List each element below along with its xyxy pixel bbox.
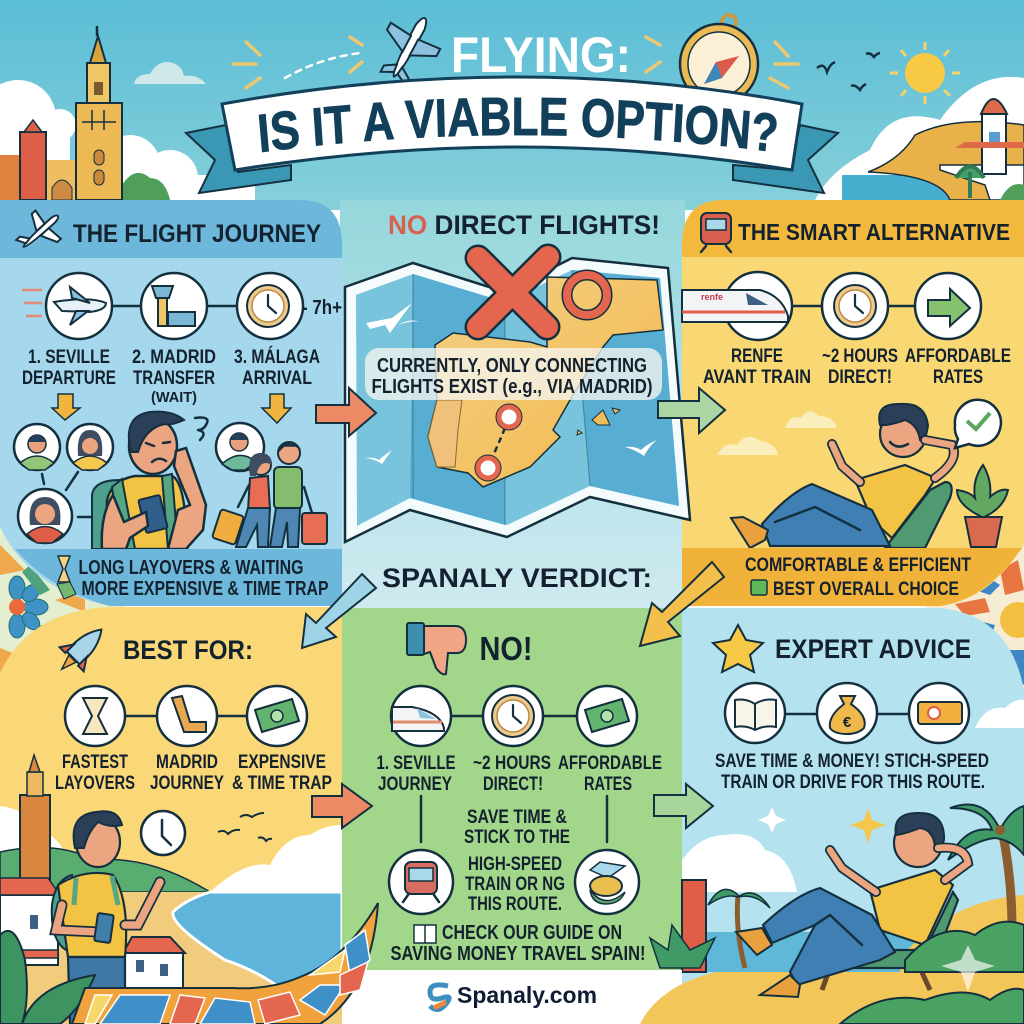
title banner [184, 76, 840, 194]
centre advice text: STICK TO THE [464, 827, 570, 848]
step labels: 1. SEVILLE [376, 753, 456, 774]
centre advice text: TRAIN OR NG [465, 874, 565, 895]
icon: money bag: € [843, 714, 852, 731]
arrow: orange to map [316, 388, 376, 436]
icon: rocket [50, 618, 113, 681]
map caption [365, 348, 662, 400]
step labels: (WAIT) [151, 389, 197, 406]
connector line [110, 305, 240, 307]
alternative labels: RENFE [731, 346, 783, 367]
icon: train [391, 686, 451, 746]
potted plant [957, 465, 1008, 547]
arrow: orange to no panel [312, 784, 372, 828]
down arrows [52, 394, 291, 423]
birds [218, 813, 272, 841]
Seville cathedral skyline [0, 26, 170, 200]
connector [110, 715, 250, 717]
tourist with phone [52, 811, 160, 1024]
sky background [0, 0, 1024, 210]
best for labels: FASTEST [62, 752, 128, 773]
worried traveller [92, 412, 208, 549]
step labels: ARRIVAL [242, 368, 312, 389]
mosaic serpent [72, 903, 378, 1024]
icon: train header [701, 213, 731, 252]
white clouds on horizon [0, 806, 342, 892]
no heading: NO! [480, 630, 532, 667]
step labels: TRANSFER [133, 368, 215, 389]
step labels: ~2 HOURS [473, 753, 551, 774]
icon: train front [389, 850, 453, 914]
arrow: green to expert [654, 784, 713, 828]
panel: flight journey [0, 200, 342, 606]
route [492, 428, 505, 458]
small cloud [134, 62, 206, 84]
step labels: RATES [584, 774, 632, 795]
bushes [840, 922, 1024, 1024]
icon: open book [414, 925, 436, 943]
flight journey bullet text [78, 557, 328, 600]
Iberian peninsula [428, 277, 663, 487]
compass [680, 15, 758, 104]
white houses [0, 878, 185, 989]
verdict bullets: COMFORTABLE & EFFICIENT [745, 555, 971, 576]
sea [173, 892, 342, 1005]
step labels: DIRECT! [483, 774, 543, 795]
left clouds [0, 80, 255, 208]
title banner: IS IT A VIABLE OPTION? [258, 98, 777, 152]
sparkle [941, 945, 995, 992]
verdict heading: SPANALY VERDICT: [382, 563, 652, 593]
alternative labels [703, 346, 1011, 388]
sand [640, 972, 1024, 1024]
step labels: 1. SEVILLE [28, 347, 110, 368]
panel: smart alternative [682, 200, 1024, 606]
expert heading: EXPERT ADVICE [775, 634, 971, 664]
guide callout: SAVING MONEY TRAVEL SPAIN! [390, 943, 646, 965]
bottom band [682, 548, 1022, 606]
sand [0, 892, 342, 1024]
heading: no direct flights: NO DIRECT FLIGHTS! [388, 210, 660, 240]
alternative header band [682, 200, 1024, 257]
icon: money bag on map [575, 850, 639, 914]
bottom band [15, 549, 342, 606]
icon: star [713, 625, 763, 672]
map [345, 257, 690, 542]
connector [780, 713, 920, 715]
red cross [478, 257, 548, 327]
best for heading: BEST FOR: [123, 635, 253, 665]
mosaic right side [925, 535, 1024, 700]
flight journey bullet text: LONG LAYOVERS & WAITING [78, 557, 304, 579]
step labels: JOURNEY [378, 774, 452, 795]
panel: expert advice [640, 608, 1024, 1024]
red circle [567, 275, 607, 315]
arrow: blue verdict to best for [302, 574, 376, 648]
connector [450, 715, 580, 717]
avatars [14, 423, 264, 543]
guide callout [390, 922, 646, 965]
centre advice text: HIGH-SPEED [468, 854, 562, 875]
centre advice text: SAVE TIME & [467, 807, 567, 828]
arrow: green to alternative [658, 388, 725, 433]
panel: no verdict [342, 608, 683, 970]
seville tower small [20, 755, 50, 880]
tropical plant at green edge [650, 925, 715, 968]
distant sea and hills [682, 932, 1024, 972]
small palm [708, 889, 770, 968]
birds [817, 53, 880, 90]
flight journey heading: THE FLIGHT JOURNEY [73, 220, 321, 248]
best for labels: MADRID [156, 752, 218, 773]
icon: clock step [237, 273, 303, 339]
centre advice text: THIS ROUTE. [468, 894, 562, 915]
icon: clock [483, 686, 543, 746]
panel: centre background [340, 200, 685, 610]
guide callout: CHECK OUR GUIDE ON [442, 922, 622, 944]
alternative labels: DIRECT! [828, 367, 892, 388]
icon: Renfe train [682, 272, 792, 340]
foliage [0, 931, 95, 1024]
green hill [0, 848, 210, 892]
right hill village [815, 77, 1024, 200]
centre advice text [464, 807, 570, 915]
step labels [376, 753, 662, 795]
best for labels: JOURNEY [150, 773, 224, 794]
arrow: yellow verdict to no [640, 562, 724, 646]
icon: hourglass [58, 556, 70, 582]
relaxed traveller on seat [731, 404, 954, 548]
sky cloud [975, 700, 1024, 728]
step labels: 3. MÁLAGA [234, 346, 320, 368]
icon: airplane in title [368, 5, 450, 91]
speech bubble check [955, 400, 1001, 448]
speech bubble clock [141, 811, 185, 855]
birds on map [365, 440, 657, 464]
sun [890, 42, 960, 104]
flight journey bullet text: MORE EXPENSIVE & TIME TRAP [82, 578, 328, 600]
palm tree [948, 804, 1024, 930]
icon: thumbs down [407, 623, 466, 674]
icon: plane step [22, 273, 112, 339]
small clouds [717, 411, 837, 455]
expert text [715, 751, 989, 793]
icon: Renfe train: renfe [701, 292, 723, 302]
icon: cash [577, 686, 637, 746]
verdict bullets: BEST OVERALL CHOICE [773, 579, 959, 600]
icon: book [725, 683, 785, 743]
red building [682, 880, 706, 972]
icon: clock [822, 273, 888, 339]
icon: seat [157, 686, 217, 746]
verdict bullets [745, 555, 971, 600]
alternative labels: ~2 HOURS [822, 346, 898, 367]
title: flying: FLYING: [451, 27, 631, 83]
map caption: CURRENTLY, ONLY CONNECTING [377, 355, 647, 377]
alternative labels: RATES [933, 367, 983, 388]
icon: hourglass [65, 686, 125, 746]
best for labels [55, 752, 332, 794]
step labels: 2. MADRID [132, 347, 216, 368]
sand corner [640, 972, 717, 1024]
panel: best for [0, 607, 342, 1024]
map caption: FLIGHTS EXIST (e.g., VIA MADRID) [372, 376, 652, 398]
footer band [342, 970, 682, 1024]
vertical connectors [421, 796, 607, 842]
walking family with luggage [212, 442, 327, 547]
icon: ticket [909, 683, 969, 743]
relaxing man on lounge chair [736, 813, 968, 997]
best for labels: & TIME TRAP [232, 773, 332, 794]
mosaic left side [0, 520, 125, 685]
decorative rays and trail [233, 37, 798, 88]
icon: money [57, 582, 76, 599]
best for labels: LAYOVERS [55, 773, 135, 794]
white cloud [682, 834, 797, 892]
sparkles [758, 807, 886, 844]
step labels: AFFORDABLE [558, 753, 662, 774]
step labels: DEPARTURE [22, 368, 116, 389]
icon: control tower [141, 273, 207, 339]
icon: cash [247, 686, 307, 746]
connector line [780, 305, 930, 307]
icon: airplane header [10, 202, 71, 262]
icon: green arrow [915, 273, 981, 339]
alternative labels: AVANT TRAIN [703, 367, 811, 388]
7h label: - 7h+ [302, 297, 342, 319]
logo: Spanaly.com [457, 982, 597, 1008]
flight journey header band [0, 200, 342, 258]
step labels [22, 346, 320, 406]
best for labels: EXPENSIVE [238, 752, 326, 773]
icon: money bag [817, 683, 877, 743]
